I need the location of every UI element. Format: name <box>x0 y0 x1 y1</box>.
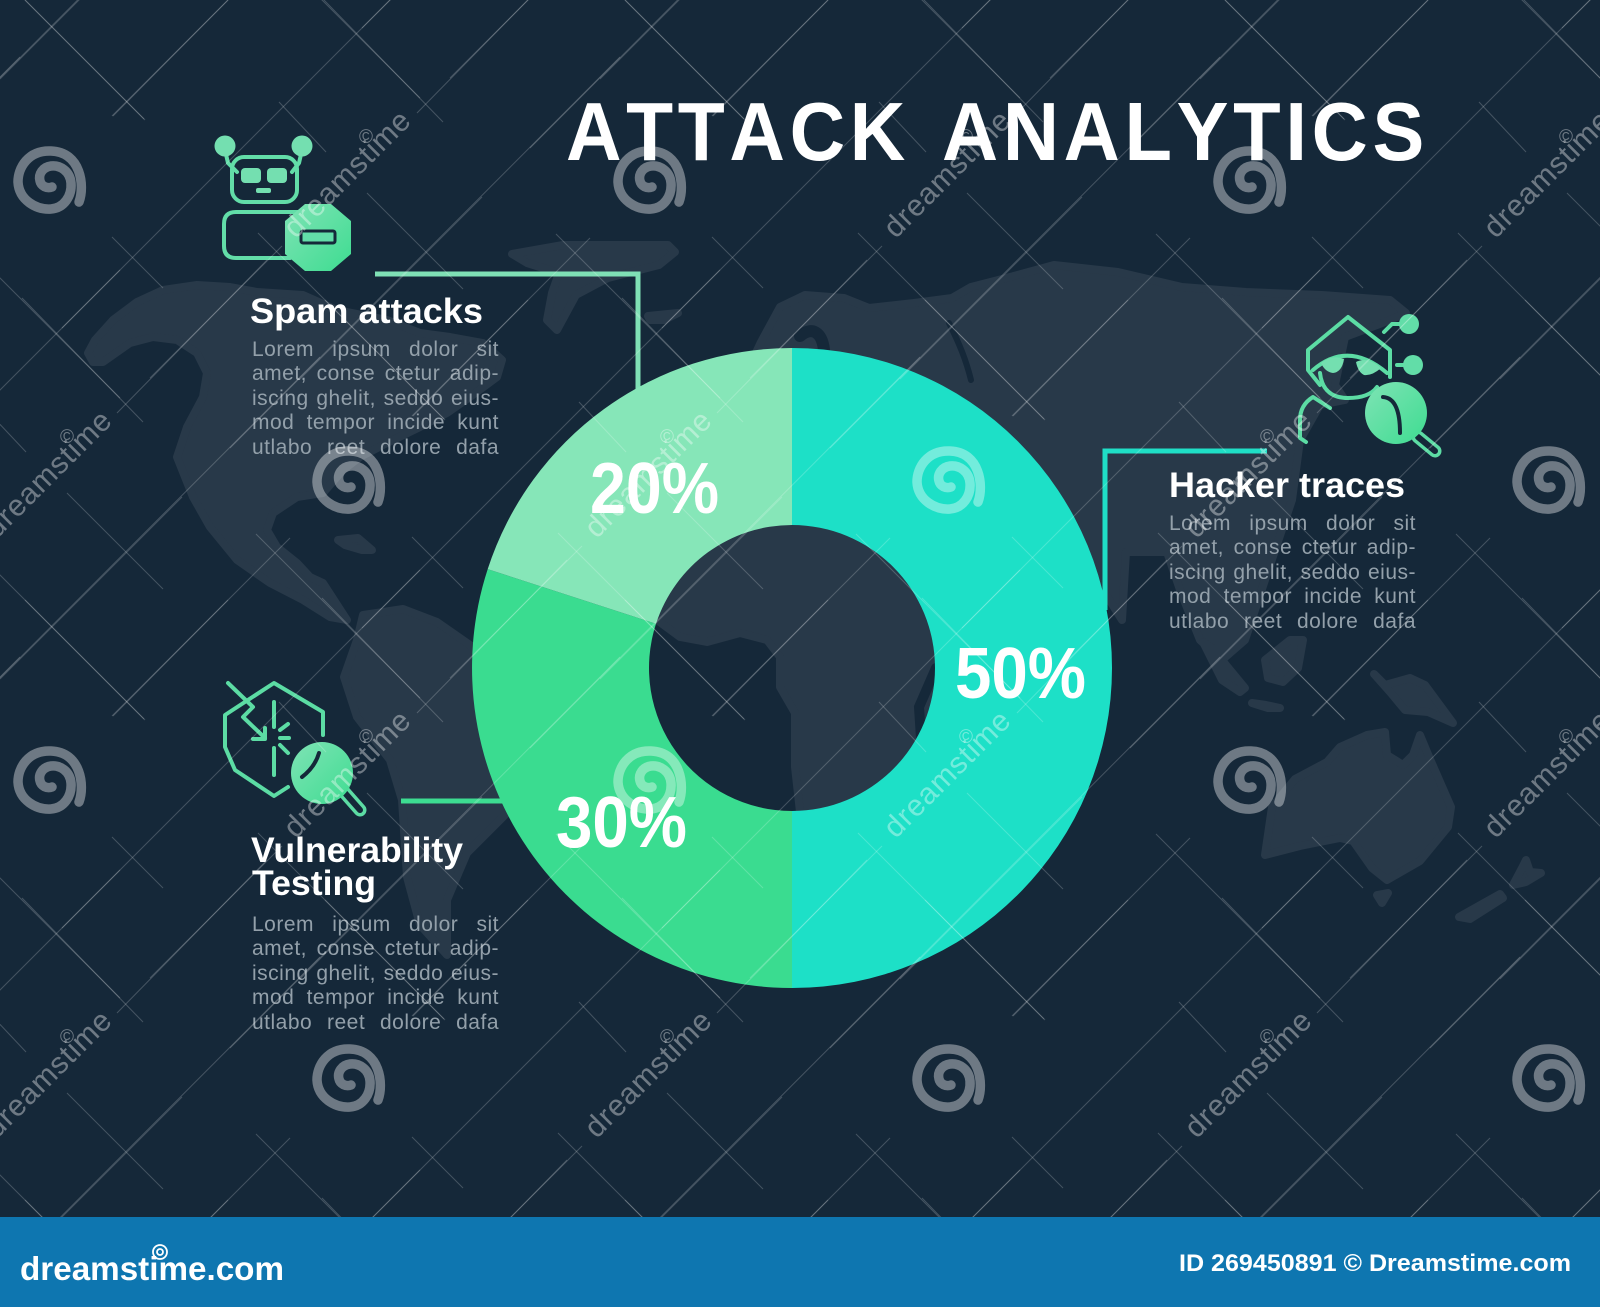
label: 50%: 50% <box>955 634 1086 714</box>
map: Australia <box>1265 732 1451 880</box>
title <box>566 85 1429 178</box>
map: Cuba <box>338 538 372 550</box>
watermark: copyright marks: © <box>60 1027 74 1048</box>
icon: cracked shield with magnifier <box>225 683 360 810</box>
watermark: wordmarks <box>0 104 1600 1144</box>
text block: spam attacks: amet, conse ctetur adip- <box>252 362 499 385</box>
text block: hacker traces: mod tempor incide kunt <box>1169 585 1416 608</box>
connector: spam attacks <box>375 274 638 395</box>
watermark: wordmarks: dreamstime <box>578 404 718 544</box>
footer: image id: ID 269450891 © Dreamstime.com <box>1179 1250 1571 1277</box>
watermark: copyright marks: © <box>1559 727 1573 748</box>
watermark: copyright marks: © <box>959 127 973 148</box>
watermark: wordmarks: dreamstime <box>578 1004 718 1144</box>
watermark: copyright marks <box>60 127 1573 1048</box>
text block: spam attacks <box>252 338 499 458</box>
map: Eurasia and Africa <box>600 265 1406 830</box>
text block: vulnerability testing: Lorem ipsum dolor sit <box>252 912 499 936</box>
text block: spam attacks: utlabo reet dolore dafa <box>252 436 499 458</box>
title: ATTACK <box>566 85 910 178</box>
icon: robot with stop sign <box>214 136 351 271</box>
text block: vulnerability testing: utlabo reet dolore dafa <box>252 1010 499 1034</box>
segment: 50% <box>792 348 1112 988</box>
map: Greenland <box>512 245 675 330</box>
text block: hacker traces: Lorem ipsum dolor sit <box>1169 512 1416 534</box>
map: inland seas <box>800 323 971 738</box>
heading: vulnerability testing: Vulnerability <box>251 831 464 870</box>
watermark: copyright marks: © <box>1260 1027 1274 1048</box>
text block: vulnerability testing <box>252 912 499 1034</box>
text block: vulnerability testing: mod tempor incide kunt <box>252 986 499 1009</box>
watermark: wordmarks: dreamstime <box>1178 1004 1318 1144</box>
connector: hacker traces <box>1105 451 1267 610</box>
map: South America <box>344 609 520 955</box>
footer: logo spiral <box>153 1245 167 1259</box>
watermark: copyright marks: © <box>359 127 373 148</box>
watermark: copyright marks: © <box>359 727 373 748</box>
world map <box>88 245 1541 955</box>
map: Tasmania <box>1377 893 1388 903</box>
map: Iceland <box>648 313 678 320</box>
heading: vulnerability testing: Testing <box>252 864 376 903</box>
map: New Zealand north <box>1513 860 1541 885</box>
footer band <box>0 1217 1600 1307</box>
label: 20%: 20% <box>590 449 719 529</box>
heading: vulnerability testing <box>251 831 464 903</box>
connector: vulnerability testing <box>401 798 515 804</box>
watermark: copyright marks: © <box>1559 127 1573 148</box>
heading: spam attacks: Spam attacks <box>250 292 483 331</box>
watermark: copyright marks: © <box>959 727 973 748</box>
watermark: copyright marks: © <box>60 427 74 448</box>
watermark: spirals <box>18 151 1580 1107</box>
heading: hacker traces: Hacker traces <box>1169 466 1405 505</box>
watermark: wordmarks: dreamstime <box>1178 404 1318 544</box>
map: Sumatra <box>1203 642 1245 692</box>
watermark: wordmarks: dreamstime <box>877 704 1017 844</box>
text block: vulnerability testing: iscing ghelit, seddo eius- <box>252 962 499 984</box>
text block: hacker traces: amet, conse ctetur adip- <box>1169 536 1416 559</box>
watermark: copyright marks: © <box>660 427 674 448</box>
map: New Guinea <box>1374 674 1453 723</box>
map: New Zealand south <box>1459 894 1503 919</box>
text block: spam attacks: Lorem ipsum dolor sit <box>252 338 499 360</box>
icon: hacker with magnifier <box>1300 314 1435 451</box>
watermark: wordmarks: dreamstime <box>277 104 417 244</box>
text block: hacker traces <box>1169 512 1416 632</box>
text block: spam attacks: iscing ghelit, seddo eius- <box>252 386 499 410</box>
watermark: copyright marks: © <box>1260 427 1274 448</box>
text block: hacker traces: iscing ghelit, seddo eius- <box>1169 560 1416 584</box>
watermark: wordmarks: dreamstime <box>877 104 1017 244</box>
map: Java <box>1252 703 1280 708</box>
text block: vulnerability testing: amet, conse ctetur adip- <box>252 937 499 960</box>
title: ANALYTICS <box>942 85 1429 178</box>
watermark: wordmarks: dreamstime <box>277 704 417 844</box>
text block: hacker traces: utlabo reet dolore dafa <box>1169 610 1416 632</box>
segment: 20% <box>488 348 792 624</box>
map: North America <box>88 285 502 620</box>
text block: spam attacks: mod tempor incide kunt <box>252 411 499 434</box>
map: Borneo <box>1265 640 1303 682</box>
donut chart <box>472 348 1112 988</box>
footer: logo text: dreamstime.com <box>20 1250 284 1287</box>
label: 30%: 30% <box>556 783 687 863</box>
watermark: copyright marks: © <box>660 1027 674 1048</box>
segment: 30% <box>472 569 792 988</box>
